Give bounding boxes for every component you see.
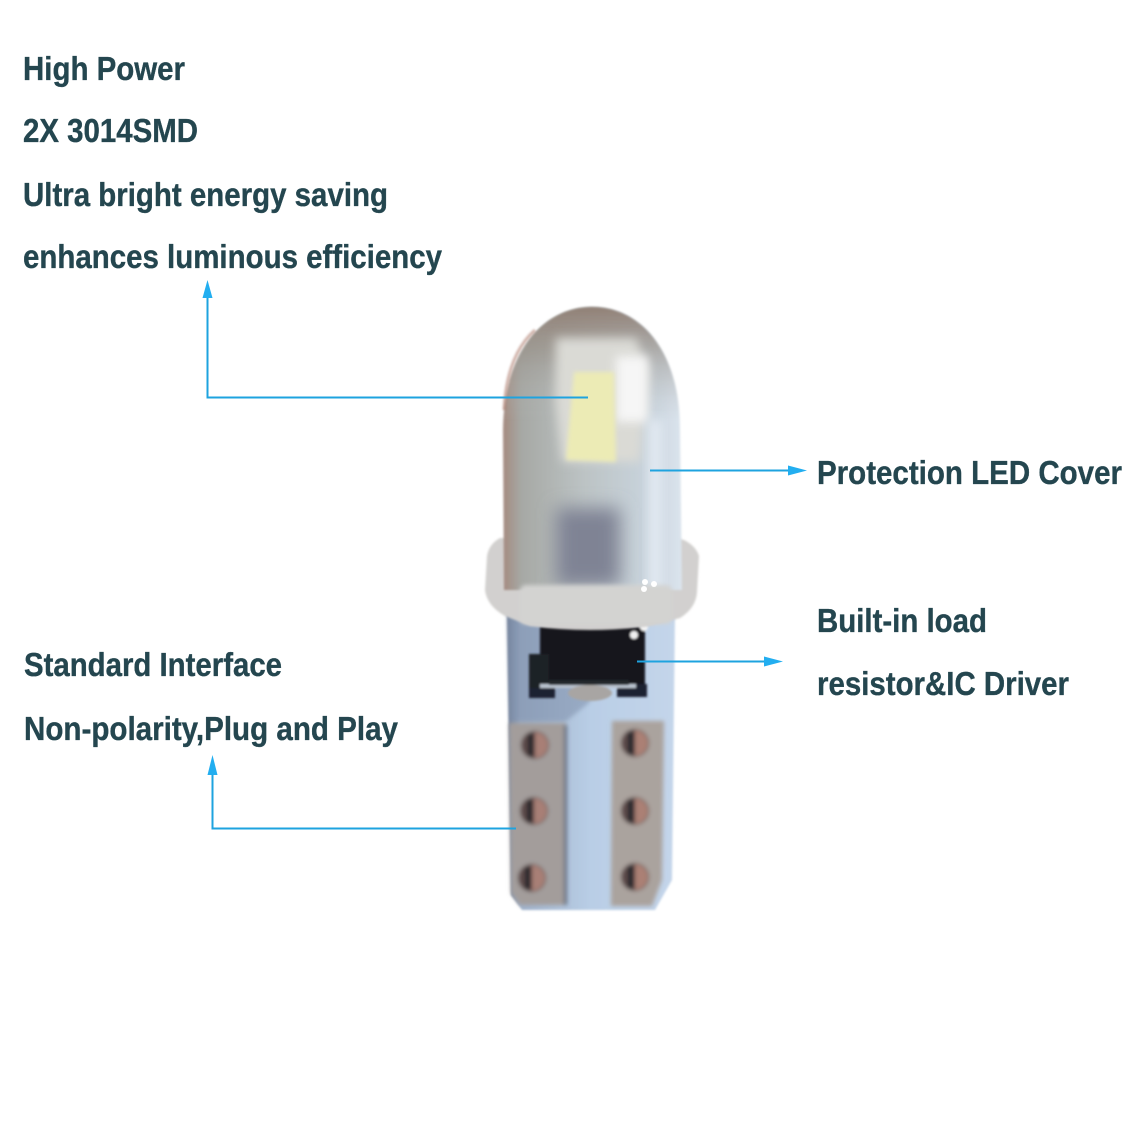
heading: high power feature text: High Power — [23, 50, 185, 87]
second LED shadow — [556, 508, 620, 586]
label: standard interface: Standard Interface — [24, 646, 282, 683]
arrow: solder pads to interface label — [208, 755, 516, 828]
cover highlight — [648, 420, 662, 610]
arrow: LED chip to high power text — [202, 280, 588, 398]
arrow: cover to protection label — [650, 466, 807, 476]
circuit board — [507, 612, 675, 910]
label: built-in resistor and IC driver: Built-in load — [817, 602, 987, 639]
heading: high power feature text: 2X 3014SMD — [23, 112, 198, 149]
IC driver chip — [529, 623, 648, 701]
heading: high power feature text — [23, 50, 443, 275]
label: built-in resistor and IC driver — [817, 602, 1069, 702]
left solder pads — [509, 723, 567, 905]
right solder pads — [611, 721, 664, 906]
heading: high power feature text: Ultra bright energy saving — [23, 176, 388, 213]
label: standard interface — [24, 646, 399, 747]
protective cover collar — [485, 538, 699, 630]
heading: high power feature text: enhances luminous efficiency — [23, 238, 443, 275]
collar front band — [520, 579, 672, 624]
LED bulb photo illustration — [485, 307, 699, 910]
arrow: IC chip to driver label — [637, 656, 783, 666]
label: built-in resistor and IC driver: resistor&IC Driver — [817, 665, 1069, 702]
yellow LED emitter — [566, 372, 616, 462]
SMD chip housing glow — [555, 338, 648, 462]
label: standard interface: Non-polarity,Plug and Play — [24, 710, 399, 747]
protective cover dome — [503, 307, 682, 590]
